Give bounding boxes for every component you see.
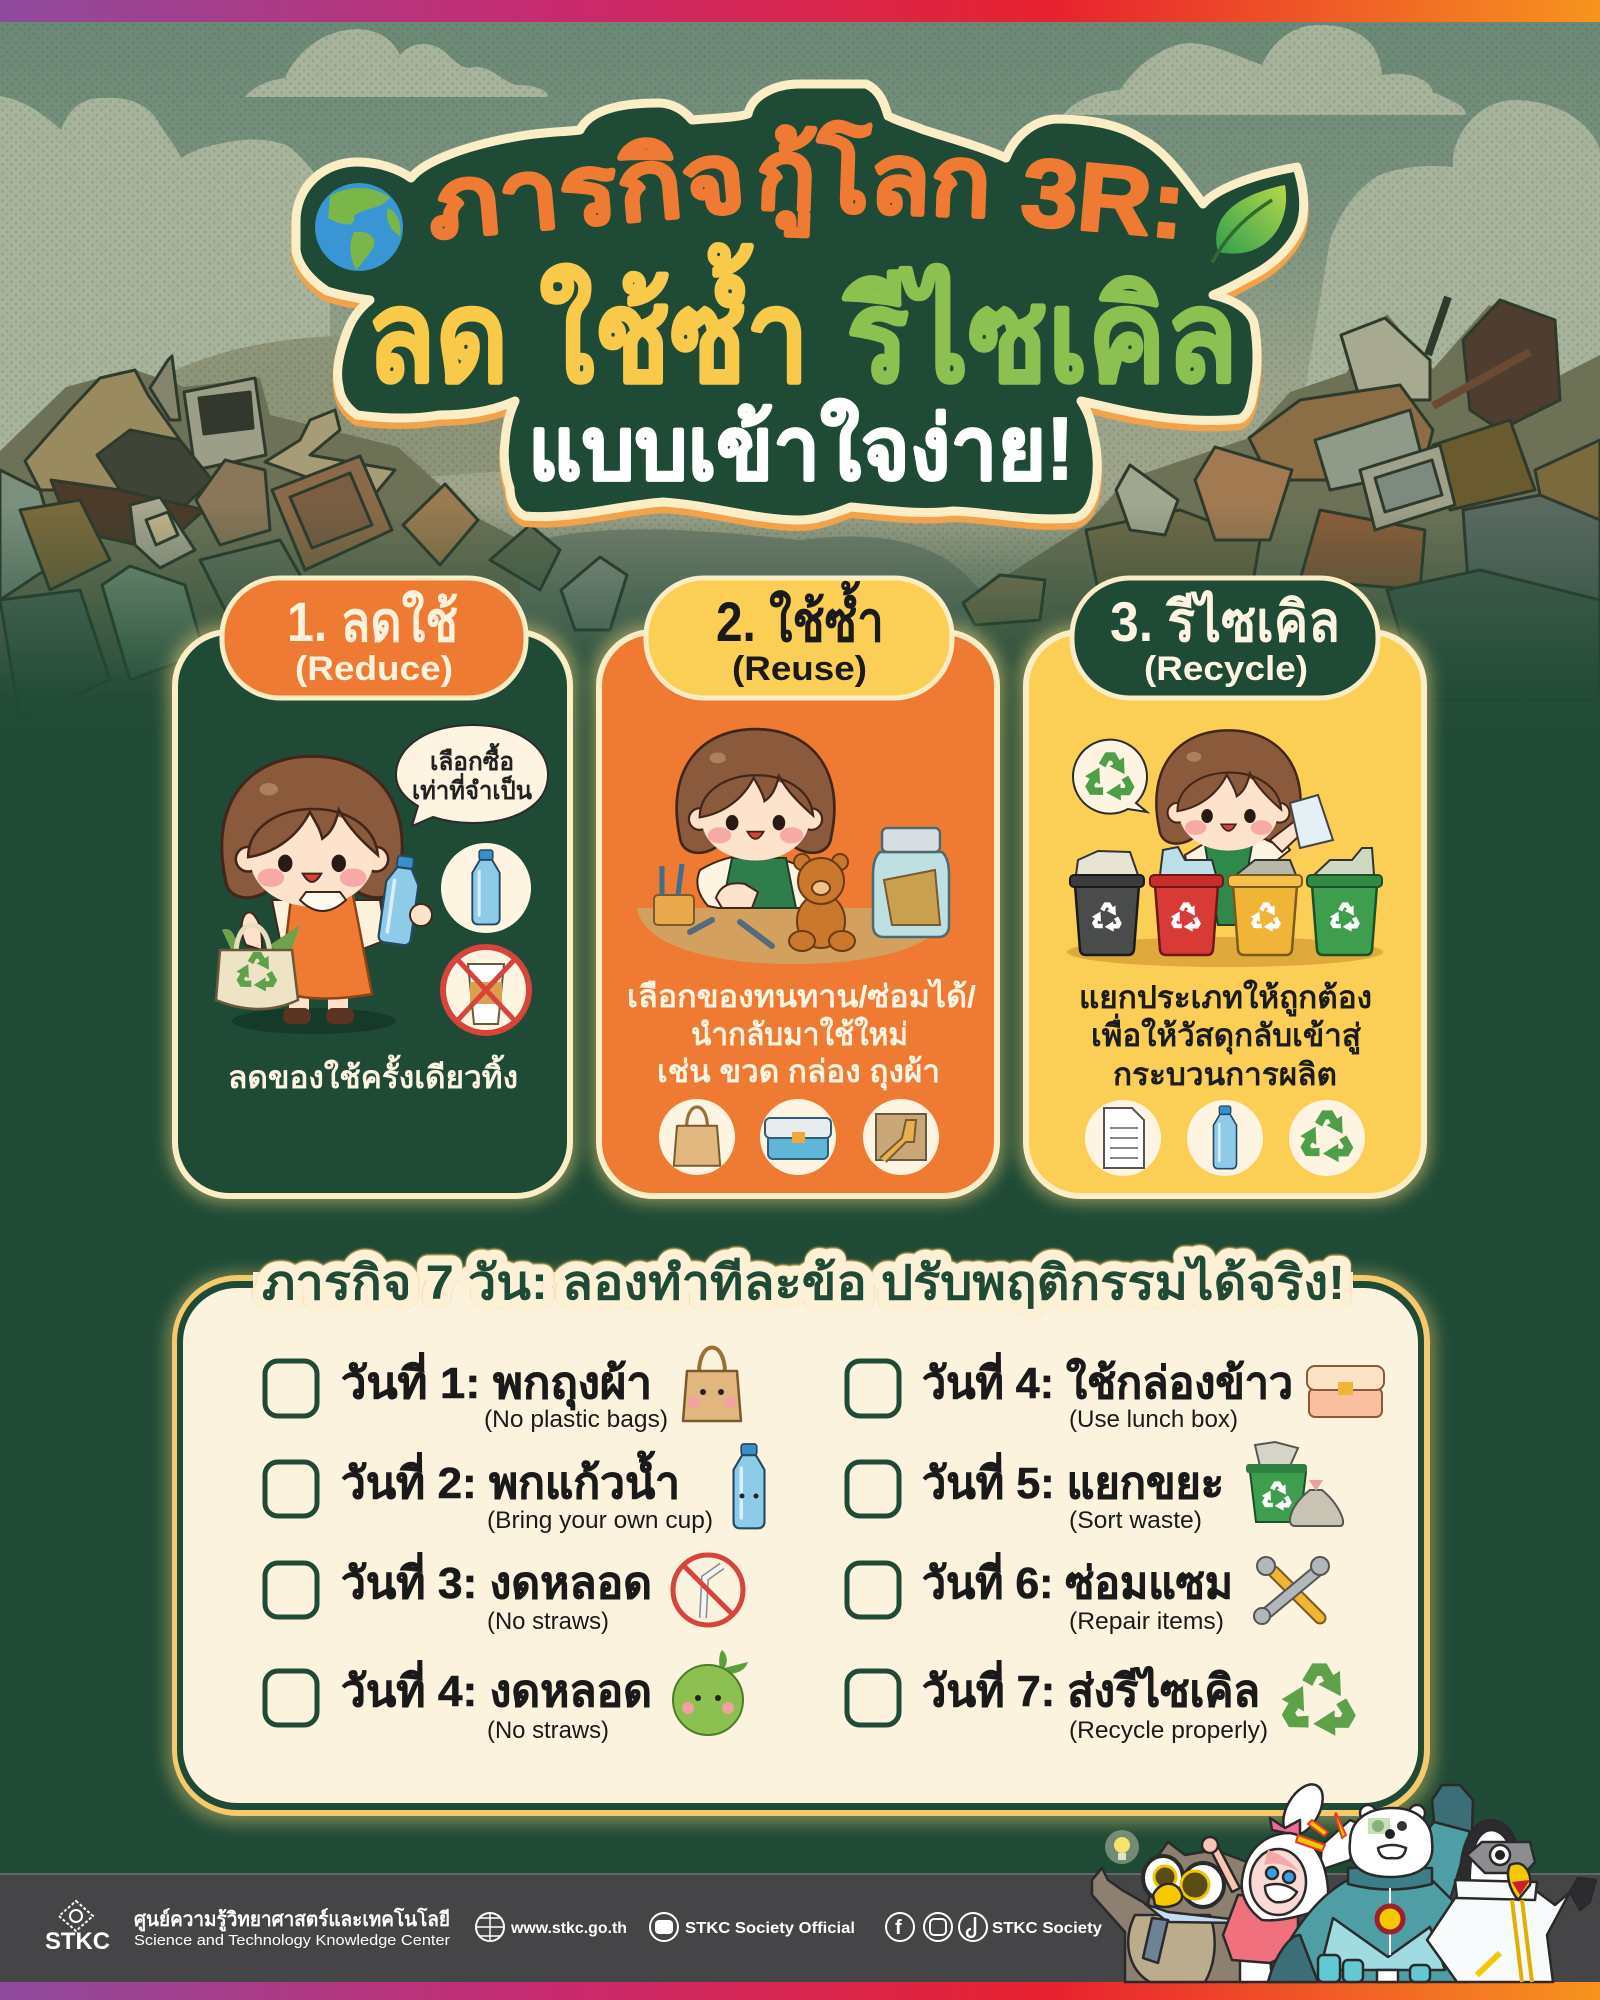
tab: reduce: 1. ลดใช้	[287, 589, 458, 653]
checkbox: day 5	[847, 1462, 899, 1516]
panel: card 1 reduce	[168, 578, 577, 1203]
icon: bin and sack	[1246, 1442, 1343, 1526]
icon: no disposable cup	[443, 947, 529, 1033]
organisation name	[134, 1907, 450, 1949]
tab: reuse	[646, 578, 952, 698]
tab: reuse: (Reuse)	[732, 650, 867, 688]
checkbox: day 7	[847, 1671, 899, 1725]
mascot: penguin in lab coat	[1427, 1820, 1596, 1982]
mascot: rabbit	[1223, 1778, 1362, 1982]
body text	[1079, 979, 1372, 1092]
yellow bin	[1228, 860, 1302, 955]
tab: reuse: 2. ใช้ซ้ำ	[716, 581, 884, 653]
mascots group	[1092, 1778, 1596, 1982]
task: day 3	[341, 1552, 652, 1635]
panel: 7-day mission checklist	[166, 1254, 1436, 1824]
task: day 5: วันที่ 5: แยกขยะ	[922, 1452, 1224, 1508]
icon: lunch box	[760, 1099, 836, 1175]
task: day 1	[341, 1352, 668, 1433]
body text: แยกประเภทให้ถูกต้อง	[1079, 979, 1372, 1017]
task: day 4 right	[922, 1352, 1293, 1433]
icon: lunch box	[1307, 1366, 1384, 1417]
tab: recycle: 3. รีไซเคิล	[1110, 589, 1340, 653]
task: day 3: (No straws)	[487, 1608, 609, 1635]
illustration: girl with bag and bottle	[216, 756, 432, 1034]
green bin	[1307, 848, 1382, 955]
checkbox: day 2	[265, 1462, 317, 1516]
checkbox: day 4 right	[847, 1361, 899, 1416]
title line 1: 3R:	[1017, 138, 1190, 259]
title line 3: แบบเข้าใจง่าย!	[528, 398, 1074, 498]
icon: smiling fruit	[673, 1650, 748, 1735]
speech bubble	[396, 725, 548, 826]
checkbox: day 3	[265, 1563, 317, 1617]
caption: ลดของใช้ครั้งเดียวทิ้ง	[228, 1054, 518, 1095]
mascot: owl	[1092, 1837, 1247, 1982]
task: day 5	[922, 1452, 1224, 1534]
speech bubble: เลือกซื้อ	[430, 742, 514, 776]
checkbox: day 1	[265, 1361, 317, 1416]
task: day 4 left	[341, 1660, 652, 1744]
top gradient bar	[0, 0, 1600, 22]
clouds	[0, 25, 1600, 470]
task: day 2: วันที่ 2: พกแก้วน้ำ	[341, 1450, 680, 1508]
title line 1: ภารกิจ	[423, 122, 750, 259]
glass jar	[873, 828, 949, 937]
task: day 6: (Repair items)	[1069, 1608, 1224, 1635]
icon: no straw	[673, 1555, 743, 1625]
icon: smiling tote	[683, 1348, 741, 1421]
task: day 4 left: วันที่ 4: งดหลอด	[341, 1660, 652, 1716]
plaque shape	[296, 84, 1304, 526]
task: day 5: (Sort waste)	[1069, 1507, 1202, 1534]
illustration: girl sorting waste	[1067, 730, 1383, 967]
checkbox: day 6	[847, 1563, 899, 1617]
speech bubble: เท่าที่จำเป็น	[412, 773, 532, 805]
task: day 7	[922, 1660, 1268, 1744]
logo: STKC	[45, 1901, 110, 1955]
icon: globe	[315, 183, 403, 271]
mascot: bear in teal suit	[1268, 1785, 1473, 1982]
body text: นำกลับมาใช้ใหม่	[691, 1016, 908, 1052]
garbage heap	[0, 297, 1600, 735]
body text: กระบวนการผลิต	[1113, 1057, 1337, 1092]
tab: reduce: (Reduce)	[295, 650, 453, 688]
task: day 2: (Bring your own cup)	[487, 1507, 713, 1534]
teddy bear	[789, 854, 855, 951]
icon: plastic bottle	[1187, 1100, 1263, 1176]
title line 1: กู้โลก	[754, 118, 993, 244]
website link: www.stkc.go.th	[510, 1920, 627, 1937]
organisation name: ศูนย์ความรู้วิทยาศาสตร์และเทคโนโลยี	[134, 1907, 450, 1933]
icon: repaired item	[863, 1099, 939, 1175]
icon: smiling bottle	[734, 1444, 764, 1528]
footer bar	[0, 1873, 1600, 2000]
icon: recycle arrows	[1275, 1663, 1361, 1740]
social links: STKC Society	[992, 1920, 1102, 1937]
task: day 6	[922, 1552, 1233, 1635]
red bin	[1150, 847, 1223, 955]
logo: STKC: STKC	[45, 1928, 110, 1955]
body text	[627, 978, 976, 1091]
title line 2: ลด ใช้ซ้ำ	[367, 243, 809, 409]
title line 2: รีไซเคิล	[842, 264, 1238, 409]
panel: card 3 recycle	[1019, 578, 1431, 1203]
task: day 4 left: (No straws)	[487, 1717, 609, 1744]
right heap items	[963, 575, 1045, 625]
title plaque	[296, 84, 1304, 526]
youtube link: STKC Society Official	[685, 1920, 855, 1937]
title line 2	[367, 243, 1238, 409]
task: day 7: (Recycle properly)	[1069, 1717, 1268, 1744]
youtube link	[650, 1913, 855, 1941]
icon: paper	[1085, 1100, 1161, 1176]
icon: crossed tools	[1254, 1557, 1329, 1624]
middle heap items	[490, 525, 560, 590]
social links: f	[895, 1917, 902, 1939]
task: day 1: วันที่ 1: พกถุงผ้า	[341, 1352, 652, 1411]
task: day 1: (No plastic bags)	[484, 1406, 668, 1433]
black bin	[1070, 851, 1144, 955]
icon: leaf	[1212, 185, 1286, 263]
organisation name: Science and Technology Knowledge Center	[134, 1932, 450, 1949]
task: day 6: วันที่ 6: ซ่อมแซม	[922, 1552, 1233, 1608]
illustration: girl repairing a teddy bear	[637, 729, 951, 964]
body text: เพื่อให้วัสดุกลับเข้าสู่	[1091, 1013, 1361, 1055]
light bulb	[1105, 1830, 1139, 1864]
icon: recycle symbol	[1289, 1100, 1365, 1176]
task: day 7: วันที่ 7: ส่งรีไซเคิล	[922, 1660, 1260, 1716]
panel: card 2 reuse	[592, 578, 1004, 1203]
icon: reusable bottle	[441, 843, 531, 933]
social links	[886, 1913, 1102, 1941]
title line 1	[423, 118, 1190, 259]
left heap items	[25, 370, 180, 490]
icon: tote bag	[659, 1099, 735, 1175]
checkbox: day 4 left	[265, 1671, 317, 1725]
task: day 4 right: (Use lunch box)	[1069, 1406, 1238, 1433]
task: day 3: วันที่ 3: งดหลอด	[341, 1552, 652, 1608]
task: day 2	[341, 1450, 713, 1534]
tab: recycle: (Recycle)	[1144, 650, 1308, 688]
icon: recycle speech bubble	[1073, 740, 1147, 814]
task: day 4 right: วันที่ 4: ใช้กล่องข้าว	[922, 1352, 1293, 1408]
distant hills	[100, 336, 1260, 560]
website link	[476, 1913, 627, 1941]
body text: เช่น ขวด กล่อง ถุงผ้า	[657, 1054, 940, 1091]
tab: reduce	[222, 578, 526, 698]
panel heading: ภารกิจ 7 วัน: ลองทำทีละข้อ ปรับพฤติกรรมได้จริง!	[262, 1254, 1345, 1310]
body text: เลือกของทนทาน/ซ่อมได้/	[627, 978, 976, 1014]
tab: recycle	[1072, 578, 1378, 698]
